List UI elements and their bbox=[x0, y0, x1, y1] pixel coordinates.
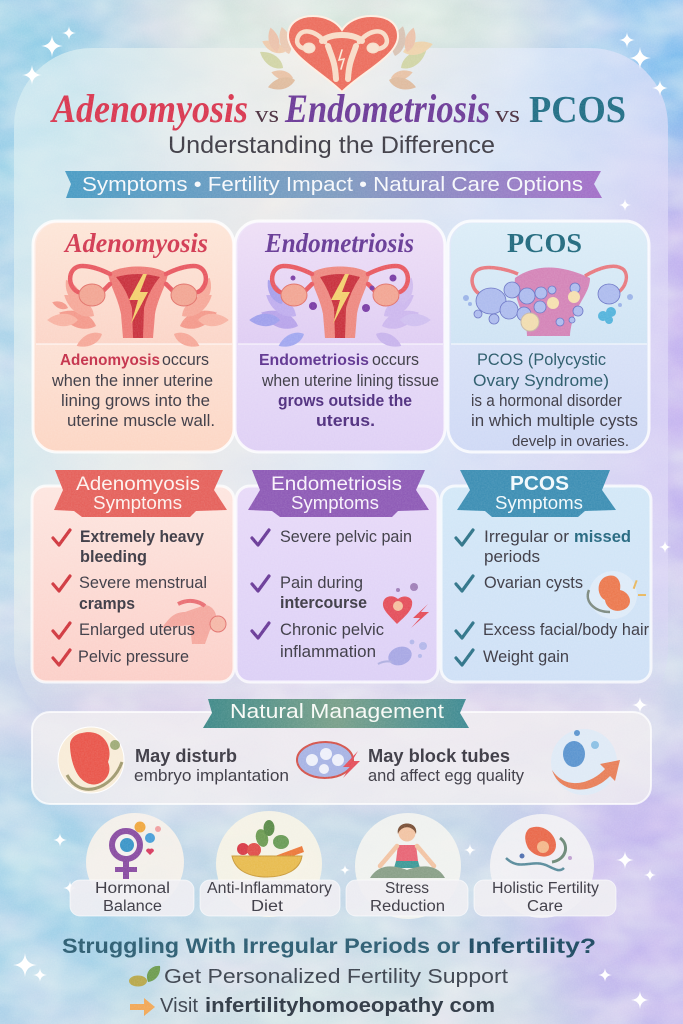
call to action heading: Infertility? bbox=[468, 934, 596, 958]
uterus inside heart bbox=[297, 31, 387, 79]
icon: cell bbox=[378, 640, 427, 669]
illustration: uterus endometriosis bbox=[249, 266, 431, 351]
call to action heading: Struggling With Irregular Periods or bbox=[62, 934, 461, 958]
symptom list: periods bbox=[484, 547, 540, 566]
icon: embryo bbox=[58, 727, 124, 793]
symptom list: Weight gain bbox=[483, 647, 569, 666]
heart bbox=[288, 16, 398, 92]
title: Endometriosis bbox=[284, 86, 490, 131]
symptom list: missed bbox=[574, 527, 631, 546]
ribbon heading bbox=[248, 470, 429, 517]
card: holistic fertility care bbox=[474, 814, 616, 918]
icon: leaves bbox=[129, 966, 160, 986]
illustration: uterus adenomyosis bbox=[47, 266, 229, 351]
ribbon heading: Endometriosis bbox=[271, 474, 402, 495]
symptom list: Chronic pelvic bbox=[280, 620, 384, 639]
subtitle: Understanding the Difference bbox=[168, 132, 495, 159]
description: uterine muscle wall. bbox=[67, 412, 215, 430]
title: vs bbox=[255, 102, 279, 128]
description bbox=[51, 351, 215, 430]
description: PCOS (Polycystic bbox=[477, 351, 606, 369]
icon: heart with lightning bbox=[383, 583, 429, 628]
panel: PCOS card bbox=[448, 221, 649, 452]
panel: natural management bbox=[32, 699, 651, 804]
symptom list: Excess facial/body hair bbox=[483, 620, 649, 639]
symptom list: Irregular or bbox=[484, 527, 569, 546]
ribbon heading: Symptoms bbox=[495, 492, 583, 513]
text: block tubes: and affect egg quality bbox=[368, 766, 524, 785]
symptom list bbox=[483, 527, 649, 666]
call to action heading bbox=[62, 934, 596, 958]
symptom list: Pelvic pressure bbox=[78, 647, 189, 666]
dome bbox=[86, 813, 184, 911]
panel: endometriosis card bbox=[235, 221, 445, 452]
label: Diet bbox=[251, 898, 284, 915]
description: Adenomyosis bbox=[60, 352, 160, 369]
description: when uterine lining tissue bbox=[261, 372, 439, 390]
icon: blocked cluster bbox=[297, 742, 360, 778]
arrow bbox=[130, 998, 155, 1016]
label: Stress bbox=[385, 880, 429, 897]
illustration: uterus bbox=[162, 601, 226, 644]
checklist bbox=[456, 530, 473, 665]
panel: adenomyosis symptoms bbox=[32, 470, 234, 682]
symptom list bbox=[78, 527, 207, 666]
description: in which multiple cysts bbox=[471, 412, 638, 430]
description: is a hormonal disorder bbox=[471, 392, 622, 410]
card: stress reduction bbox=[346, 813, 468, 919]
description: develp in ovaries. bbox=[512, 434, 629, 450]
text: block tubes bbox=[368, 746, 524, 785]
description bbox=[259, 351, 439, 430]
ribbon heading: PCOS bbox=[510, 473, 569, 495]
heading: Adenomyosis bbox=[63, 228, 208, 258]
title: vs bbox=[495, 102, 520, 128]
symptom list: Pain during bbox=[280, 573, 363, 592]
description: occurs bbox=[372, 351, 419, 369]
title bbox=[49, 86, 626, 131]
ribbon heading bbox=[54, 470, 227, 517]
label: Holistic Fertility bbox=[492, 880, 599, 897]
dome bbox=[355, 813, 461, 919]
icon: food bowl bbox=[232, 820, 304, 877]
ribbon heading bbox=[203, 699, 469, 728]
description: Ovary Syndrome) bbox=[473, 372, 609, 390]
icon: embryo ovary bbox=[588, 571, 646, 619]
illustration: polycystic ovary bbox=[463, 266, 633, 336]
description: occurs bbox=[162, 351, 209, 369]
label bbox=[200, 880, 340, 916]
text: disturb bbox=[134, 746, 289, 785]
card: hormonal balance bbox=[70, 813, 194, 916]
symptom list: Severe menstrual bbox=[79, 573, 207, 592]
ribbon heading: Natural Management bbox=[230, 701, 444, 723]
text: disturb: embryo implantation bbox=[134, 766, 289, 785]
visit line: infertilityhomoeopathy com bbox=[205, 995, 495, 1017]
label: Care bbox=[527, 898, 563, 915]
panel: adenomyosis card bbox=[33, 221, 234, 452]
description: lining grows into the bbox=[61, 392, 210, 410]
leaves left bbox=[257, 25, 296, 93]
panel: endometriosis symptoms bbox=[236, 470, 438, 682]
symptom list bbox=[280, 527, 412, 661]
checklist bbox=[53, 530, 70, 665]
label bbox=[474, 880, 616, 916]
description bbox=[471, 351, 638, 450]
label bbox=[346, 880, 468, 916]
card: anti-inflammatory diet bbox=[200, 811, 340, 917]
symptom list: inflammation bbox=[280, 642, 376, 661]
description: when the inner uterine bbox=[51, 372, 213, 390]
ribbon heading bbox=[457, 470, 616, 517]
heading: Endometriosis bbox=[264, 228, 414, 258]
heading: PCOS bbox=[507, 228, 582, 258]
icon: egg with arrow bbox=[551, 729, 620, 795]
label: Balance bbox=[103, 898, 162, 915]
text: disturb: May disturb bbox=[135, 746, 237, 766]
support line: Get Personalized Fertility Support bbox=[164, 965, 508, 988]
icon: holistic embryo bbox=[506, 827, 572, 870]
symptom list: bleeding bbox=[80, 547, 147, 566]
symptom list: Enlarged uterus bbox=[79, 620, 195, 639]
main panel bbox=[14, 48, 668, 728]
icon: female symbol bbox=[112, 822, 161, 879]
dome bbox=[216, 811, 322, 917]
ribbon heading: Symptoms bbox=[291, 492, 379, 513]
symptom list: intercourse bbox=[280, 593, 367, 612]
description: Endometriosis bbox=[259, 352, 369, 369]
title: Adenomyosis bbox=[49, 86, 248, 131]
symptom list: Ovarian cysts bbox=[484, 573, 583, 592]
ribbon heading: Adenomyosis bbox=[76, 474, 200, 495]
label: Reduction bbox=[370, 898, 445, 915]
description: uterus. bbox=[316, 412, 375, 430]
symptom list: Extremely heavy bbox=[80, 527, 204, 546]
icon: meditating woman bbox=[370, 824, 445, 878]
label: Anti-Inflammatory bbox=[207, 880, 332, 897]
description: grows outside the bbox=[278, 392, 412, 410]
ribbon: symptoms, fertility impact, natural care: Symptoms • Fertility Impact • Natural Care Options bbox=[82, 173, 583, 196]
symptom list: cramps bbox=[79, 594, 135, 613]
title: PCOS bbox=[529, 89, 626, 131]
label: Hormonal bbox=[95, 880, 170, 897]
label bbox=[70, 880, 194, 916]
visit line: Visit bbox=[160, 995, 198, 1017]
leaves right bbox=[388, 25, 434, 93]
panel: PCOS symptoms bbox=[441, 470, 651, 682]
symptom list: Severe pelvic pain bbox=[280, 527, 412, 546]
dome bbox=[490, 814, 594, 918]
checklist bbox=[252, 530, 269, 638]
icon: heart with uterus and leaves bbox=[257, 16, 434, 93]
text: block tubes: May block tubes bbox=[368, 746, 510, 766]
ribbon heading: Symptoms bbox=[93, 492, 182, 513]
